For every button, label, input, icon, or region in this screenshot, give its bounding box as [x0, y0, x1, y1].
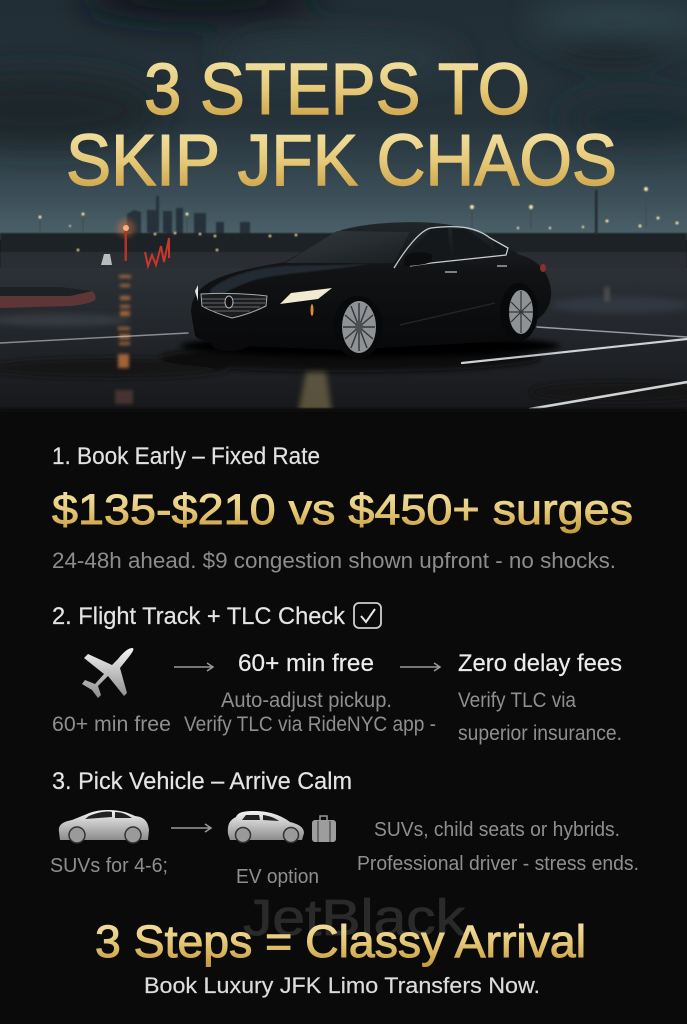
step 2 heading: 2. Flight Track + TLC Check	[52, 603, 346, 630]
arrow	[171, 824, 211, 832]
verify TLC text	[458, 689, 622, 745]
hatchback caption: EV option	[236, 866, 319, 888]
verify TLC text: Verify TLC via	[458, 689, 576, 712]
sedan caption: SUVs for 4-6;	[50, 855, 168, 877]
curb	[0, 291, 96, 308]
rear wheel	[500, 283, 538, 341]
icon: checkbox	[354, 603, 381, 628]
car	[180, 222, 560, 358]
step 3 heading: 3. Pick Vehicle – Arrive Calm	[52, 768, 352, 795]
arrow	[174, 663, 213, 671]
step 1 note: 24-48h ahead. $9 congestion shown upfront - no shocks.	[52, 548, 616, 573]
60+ min free heading: 60+ min free	[238, 650, 374, 677]
plane caption: 60+ min free	[52, 713, 171, 736]
headlights	[280, 288, 332, 304]
vehicle options text	[357, 819, 639, 875]
step 1 heading: 1. Book Early – Fixed Rate	[52, 443, 320, 470]
title: 3 STEPS TO	[144, 50, 530, 130]
auto-adjust text: Verify TLC via RideNYC app -	[184, 713, 436, 736]
auto-adjust text	[184, 689, 436, 736]
windshield	[285, 231, 410, 263]
title	[66, 50, 617, 201]
arrow	[400, 663, 440, 671]
wet reflections	[115, 275, 610, 404]
far front wheel	[211, 337, 249, 351]
price comparison: $135-$210 vs $450+ surges	[52, 486, 633, 534]
door handles	[445, 266, 507, 272]
wet tarmac	[0, 268, 687, 412]
vehicle options text: Professional driver - stress ends.	[357, 853, 639, 875]
watermark logo: JetBlack	[243, 889, 466, 946]
step 1	[52, 443, 633, 573]
icon: plane	[82, 648, 133, 698]
chrome trim	[394, 227, 508, 268]
stormy sky	[0, 0, 687, 240]
hood highlight	[210, 263, 372, 303]
icon: luggage	[312, 816, 336, 842]
verify TLC text: superior insurance.	[458, 722, 622, 745]
front wheel	[333, 296, 383, 358]
closing headline: 3 Steps = Classy Arrival	[95, 916, 586, 967]
title: SKIP JFK CHAOS	[66, 121, 617, 201]
tail light	[540, 264, 546, 272]
red beacon and sign	[101, 219, 169, 266]
grille	[201, 293, 267, 318]
call to action: Book Luxury JFK Limo Transfers Now.	[144, 973, 540, 998]
auto-adjust text: Auto-adjust pickup.	[221, 689, 392, 712]
step 3	[50, 768, 639, 888]
lower body crease	[400, 303, 495, 325]
parking lines	[0, 327, 687, 409]
distant skyline and lights	[0, 187, 687, 270]
side windows	[397, 228, 507, 266]
step 2	[52, 603, 622, 745]
icon: sedan	[59, 810, 149, 843]
hero lower edge	[0, 408, 687, 412]
zero delay fees heading: Zero delay fees	[458, 650, 622, 677]
mirror	[404, 252, 432, 266]
hero photo: car on wet tarmac	[0, 0, 687, 412]
car body	[191, 222, 551, 350]
icon: hatchback	[228, 811, 304, 842]
vehicle options text: SUVs, child seats or hybrids.	[374, 819, 620, 841]
